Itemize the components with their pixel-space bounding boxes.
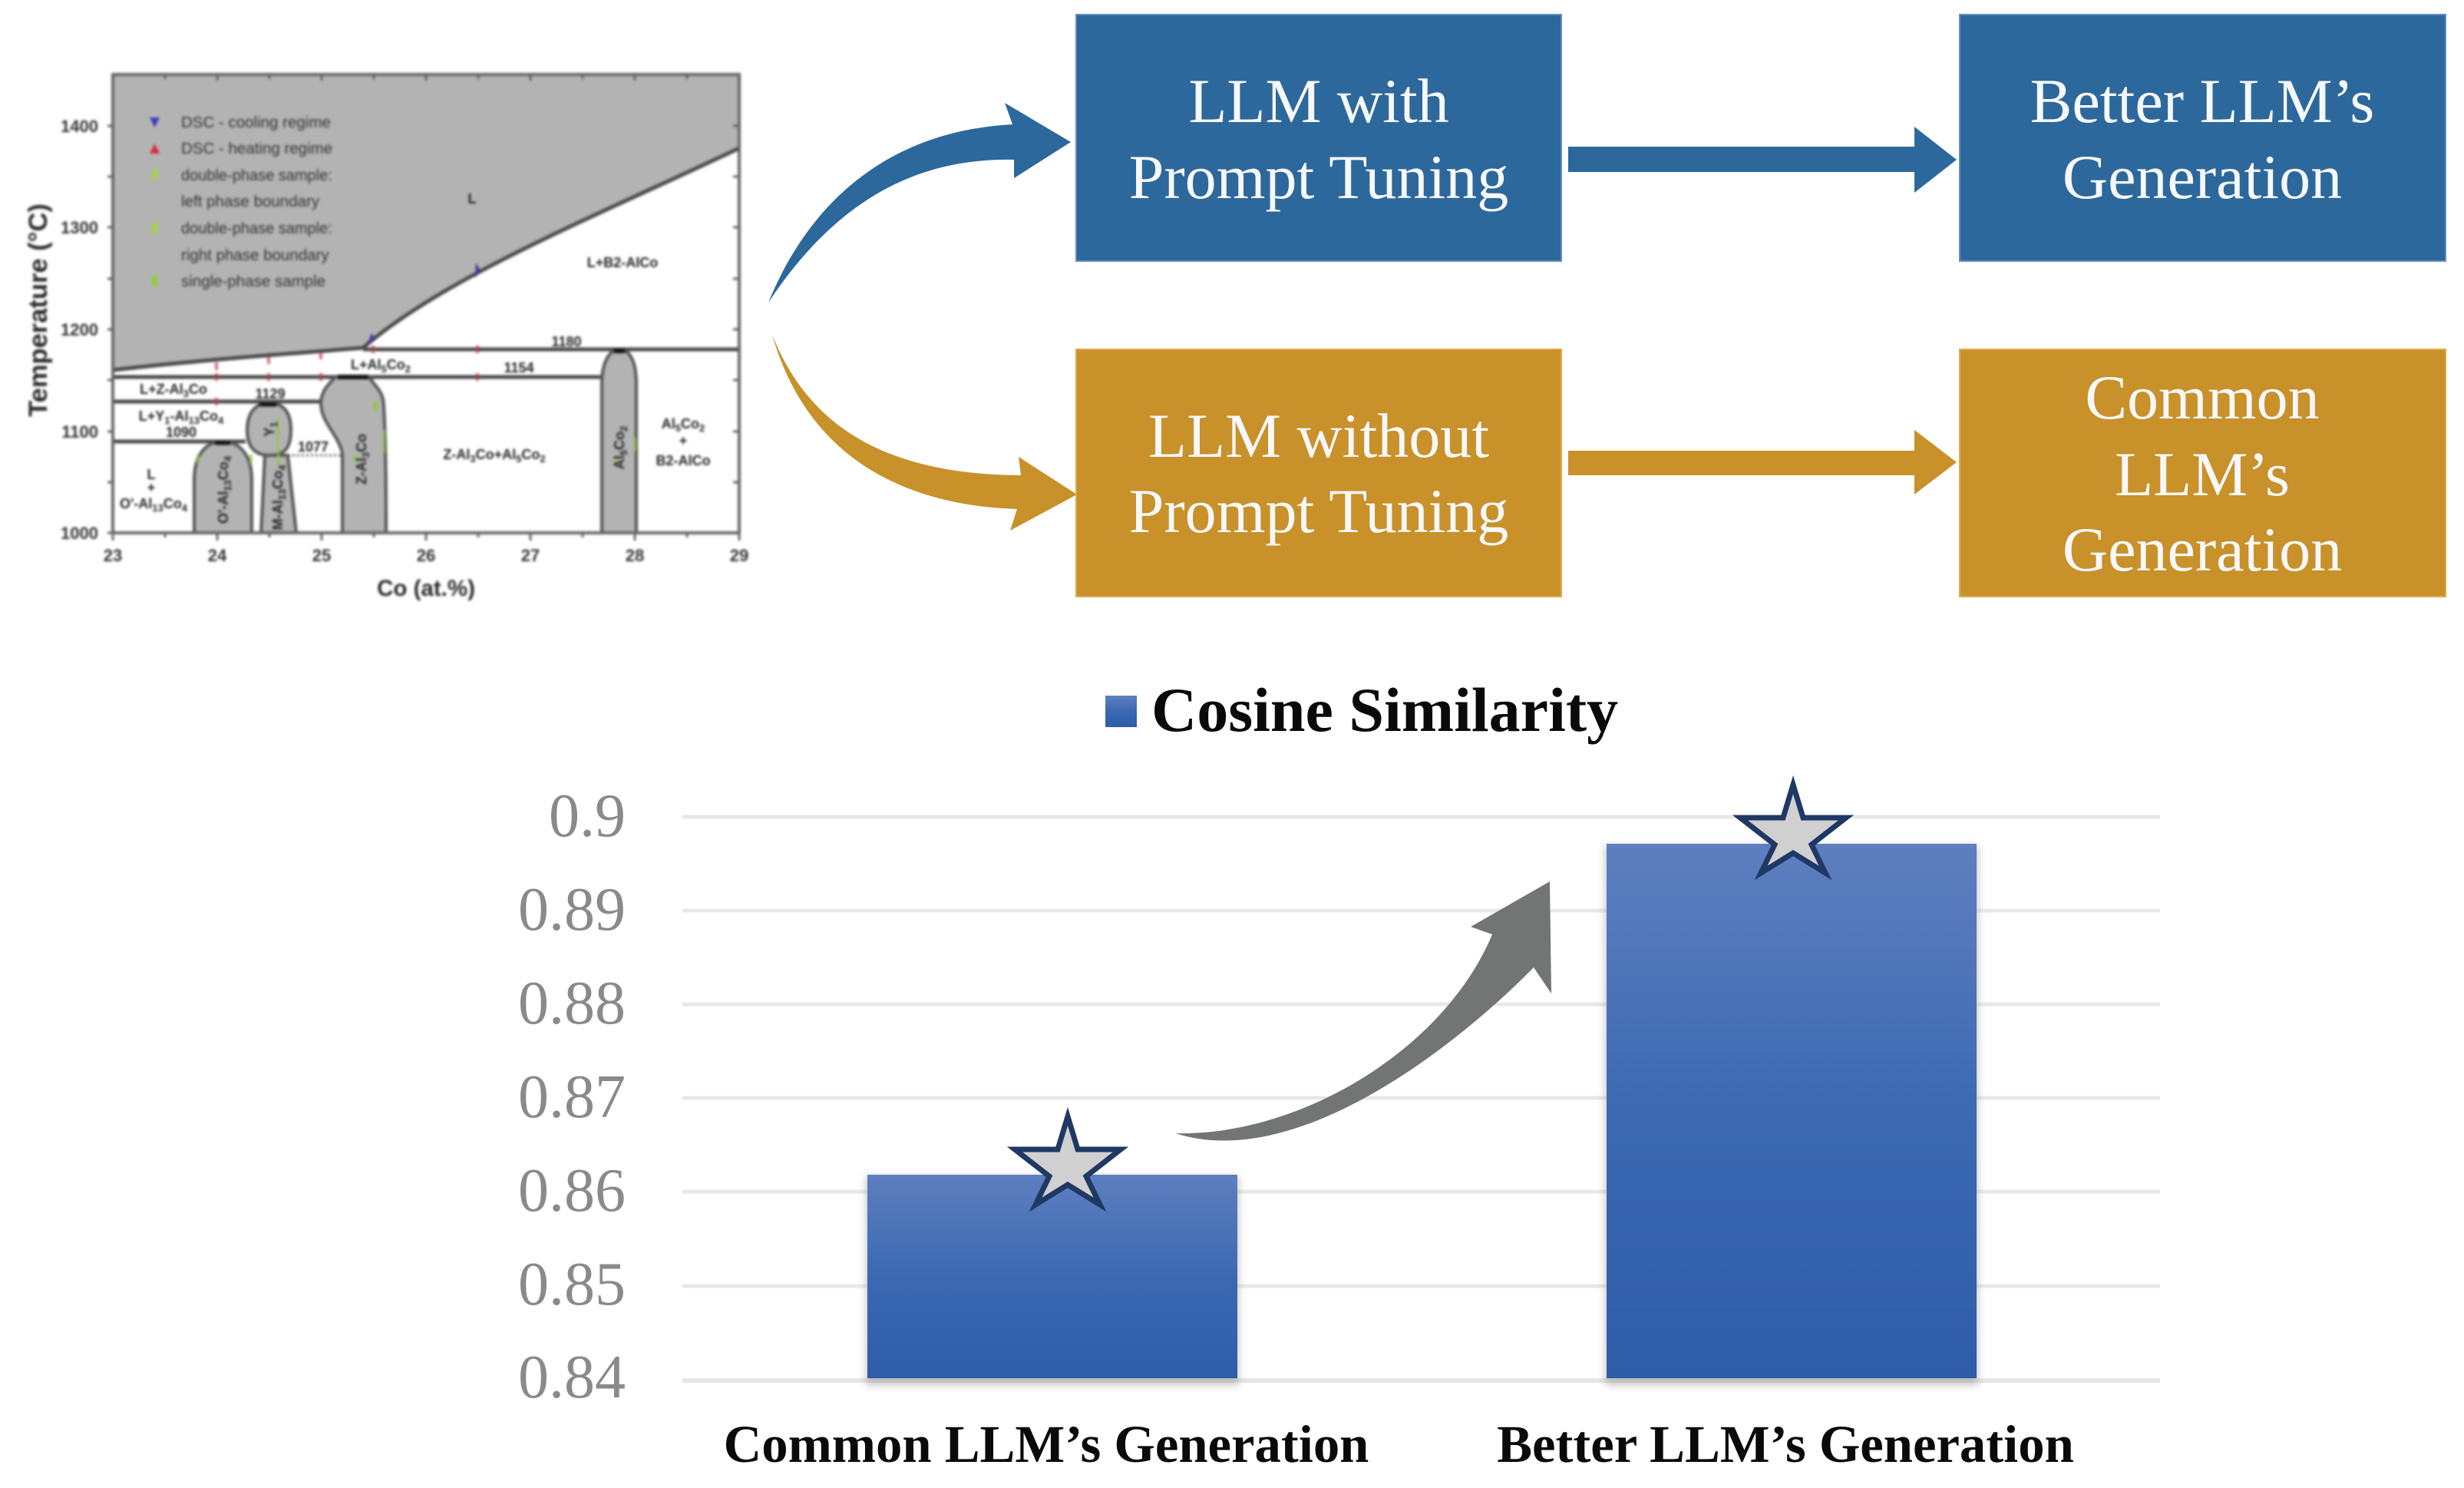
phase labels: Co bbox=[189, 382, 207, 397]
phase labels: 13 bbox=[189, 415, 200, 426]
y axis labels: 0.87 bbox=[518, 1063, 626, 1131]
phase labels: 3 bbox=[470, 453, 476, 465]
box: Common LLM's Generation: Common bbox=[2085, 362, 2320, 432]
bar: Common LLM's Generation bbox=[867, 1175, 1237, 1378]
y axis tick labels: 1100 bbox=[61, 422, 98, 441]
phase labels: Co bbox=[216, 461, 231, 480]
curved arrow: blue bbox=[768, 103, 1071, 303]
phase labels: Al bbox=[662, 416, 675, 432]
phase labels: Z-Al bbox=[443, 447, 470, 462]
chart legend: left phase boundary bbox=[181, 193, 320, 210]
box: Better LLM's Generation: Generation bbox=[2063, 142, 2342, 212]
phase labels: 5 bbox=[516, 453, 521, 465]
phase labels: Co bbox=[354, 434, 369, 452]
y axis labels: 0.85 bbox=[518, 1251, 626, 1318]
plot frame and ticks bbox=[107, 74, 739, 541]
phase labels bbox=[120, 191, 711, 530]
phase labels: 5 bbox=[381, 363, 387, 375]
x axis tick labels bbox=[104, 546, 748, 565]
phase labels: 2 bbox=[540, 453, 546, 465]
box: LLM without Prompt Tuning: LLM without bbox=[1148, 401, 1489, 471]
phase labels: O'-Al bbox=[120, 496, 152, 511]
y axis labels: 0.86 bbox=[518, 1157, 626, 1225]
x axis tick labels: 25 bbox=[312, 546, 331, 565]
phase labels: + bbox=[679, 433, 687, 448]
phase labels: 1154 bbox=[504, 360, 534, 375]
y axis labels: 0.9 bbox=[549, 782, 626, 850]
phase labels: 13 bbox=[276, 489, 288, 500]
phase labels: 4 bbox=[182, 502, 188, 514]
phase diagram chart bbox=[24, 74, 748, 601]
phase labels: 5 bbox=[618, 450, 629, 455]
chart legend bbox=[150, 114, 332, 290]
category label: Common: Common LLM’s Generation bbox=[724, 1415, 1369, 1473]
liquid region bbox=[113, 74, 739, 370]
phase region boundaries and isotherms bbox=[113, 148, 739, 455]
phase labels: Co+Al bbox=[476, 447, 516, 462]
phase labels: Co bbox=[387, 357, 405, 372]
phase labels: 4 bbox=[218, 415, 224, 426]
phase field: Al5Co2 bbox=[602, 349, 636, 533]
phase labels: -Al bbox=[170, 408, 189, 424]
phase field: Y1 bbox=[247, 403, 291, 455]
x axis tick labels: 27 bbox=[521, 546, 540, 565]
chart legend: DSC - cooling regime bbox=[181, 114, 331, 131]
phase labels: 5 bbox=[675, 422, 681, 434]
box: Better LLM's Generation: Better LLM’s bbox=[2030, 66, 2374, 136]
phase labels: Co bbox=[681, 416, 699, 432]
phase labels: Z-Al bbox=[354, 458, 369, 484]
phase labels: + bbox=[147, 480, 155, 495]
phase labels: B2-AlCo bbox=[656, 453, 711, 468]
phase labels: L bbox=[468, 191, 476, 207]
box: LLM with Prompt Tuning: LLM with bbox=[1188, 66, 1449, 136]
phase labels: 1129 bbox=[255, 386, 286, 402]
phase labels: 2 bbox=[699, 422, 705, 434]
phase labels: 3 bbox=[360, 452, 372, 458]
bar: Better LLM's Generation bbox=[1607, 844, 1977, 1378]
y axis tick labels: 1300 bbox=[61, 218, 98, 237]
phase labels: 13 bbox=[222, 480, 233, 491]
curved arrow: improvement bbox=[1175, 881, 1551, 1141]
x axis tick labels: 28 bbox=[626, 546, 644, 565]
bar chart: cosine similarity bbox=[518, 782, 2160, 1473]
straight arrow: blue bbox=[1568, 127, 1957, 193]
box: Common LLM's Generation bbox=[1960, 349, 2446, 597]
phase labels: 1 bbox=[268, 422, 279, 428]
phase labels: L+Al bbox=[351, 357, 381, 372]
phase labels: 1090 bbox=[166, 425, 197, 440]
chart legend: DSC - heating regime bbox=[181, 140, 332, 157]
phase labels: Co bbox=[270, 471, 286, 489]
box: Common LLM's Generation: Generation bbox=[2063, 514, 2342, 584]
chart legend: single-phase sample bbox=[181, 273, 325, 290]
x axis tick labels: 23 bbox=[104, 546, 122, 565]
phase labels: 2 bbox=[618, 426, 629, 432]
box: LLM without Prompt Tuning bbox=[1076, 349, 1561, 597]
y axis labels: 0.88 bbox=[518, 970, 626, 1037]
phase labels: Co bbox=[200, 408, 218, 424]
phase labels: 3 bbox=[183, 388, 189, 399]
y axis tick labels: 1200 bbox=[61, 320, 98, 339]
phase labels: Co bbox=[521, 447, 540, 462]
y axis title: Temperature (°C) bbox=[24, 203, 53, 417]
phase field: M-Al13Co4 bbox=[261, 455, 296, 533]
phase labels: L+Z-Al bbox=[140, 382, 183, 397]
phase labels: Co bbox=[163, 496, 182, 511]
chart legend: right phase boundary bbox=[181, 246, 329, 264]
phase labels: 2 bbox=[405, 363, 411, 375]
phase labels: Al bbox=[612, 455, 627, 469]
phase labels: 4 bbox=[276, 465, 288, 471]
chart legend: Cosine Similarity: Cosine Similarity bbox=[1151, 675, 1618, 745]
y axis labels: 0.89 bbox=[518, 876, 626, 944]
y axis labels bbox=[518, 782, 626, 1411]
phase labels: L bbox=[147, 467, 155, 482]
straight arrow: gold bbox=[1568, 430, 1957, 494]
phase labels: 1180 bbox=[551, 334, 582, 349]
phase labels: 13 bbox=[152, 502, 163, 514]
x axis tick labels: 29 bbox=[730, 546, 748, 565]
phase labels: 1077 bbox=[298, 439, 329, 455]
chart legend: double-phase sample: bbox=[181, 167, 332, 184]
phase labels: L+Y bbox=[139, 408, 164, 424]
x axis title: Co (at.%) bbox=[377, 576, 475, 601]
box: LLM with Prompt Tuning bbox=[1076, 15, 1561, 261]
box: Better LLM's Generation bbox=[1960, 15, 2446, 261]
y axis tick labels: 1400 bbox=[61, 117, 98, 136]
box: LLM with Prompt Tuning: Prompt Tuning bbox=[1129, 142, 1508, 212]
gridlines bbox=[682, 817, 2160, 1381]
phase field: Z-Al3Co bbox=[321, 377, 386, 533]
y axis labels: 0.84 bbox=[518, 1344, 626, 1411]
box: LLM without Prompt Tuning: Prompt Tuning bbox=[1129, 476, 1508, 546]
star: Common LLM's Generation bbox=[1015, 1116, 1121, 1205]
phase labels: O'-Al bbox=[216, 491, 231, 524]
phase labels: Y bbox=[262, 428, 277, 437]
category label: Better: Better LLM’s Generation bbox=[1497, 1415, 2074, 1473]
phase field: O'-Al13Co4 bbox=[194, 441, 252, 533]
data markers bbox=[215, 346, 479, 405]
curved arrow: gold bbox=[772, 335, 1077, 531]
box: Common LLM's Generation: LLM’s bbox=[2115, 439, 2290, 509]
chart legend: double-phase sample: bbox=[181, 220, 332, 237]
y axis tick labels: 1000 bbox=[61, 524, 98, 543]
phase labels: Co bbox=[612, 432, 627, 450]
y axis tick labels bbox=[61, 117, 98, 543]
star: Better LLM's Generation bbox=[1740, 785, 1846, 873]
bar shadows bbox=[866, 845, 1978, 1385]
phase labels: 4 bbox=[222, 455, 233, 461]
x axis tick labels: 26 bbox=[417, 546, 435, 565]
x axis tick labels: 24 bbox=[208, 546, 227, 565]
phase labels: 1 bbox=[164, 415, 170, 426]
phase labels: M-Al bbox=[270, 500, 286, 530]
phase labels: L+B2-AlCo bbox=[587, 255, 658, 270]
